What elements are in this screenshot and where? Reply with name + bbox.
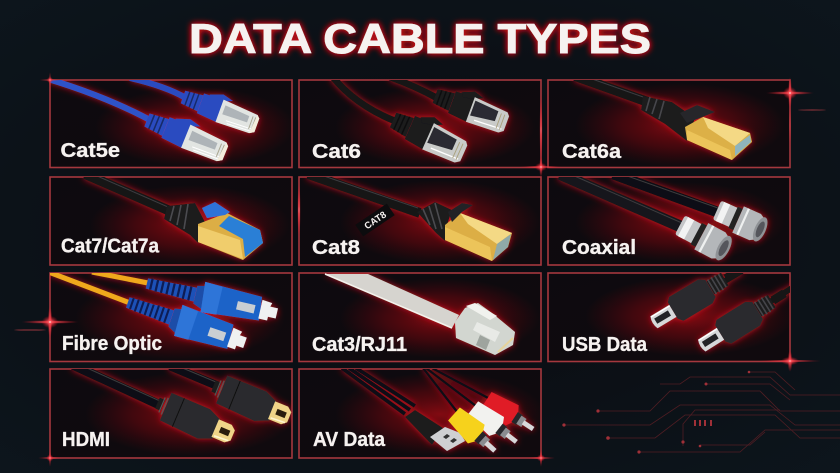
icon: flat cable and RJ11 plug (325, 274, 515, 355)
panel: USB Data (547, 272, 791, 362)
icon: blue Cat5e cables (45, 78, 261, 164)
label: Cat8 (312, 237, 360, 259)
icon: fibre optic SC connectors (50, 273, 282, 354)
label: Coaxial (562, 237, 636, 259)
icon: CAT8 cable tag (355, 204, 395, 236)
icon: Cat8 plug (308, 172, 512, 261)
panel: Fibre Optic (46, 269, 292, 362)
title: DATA CABLE TYPES (189, 15, 651, 62)
icon: coaxial F connectors (560, 171, 771, 264)
icon: HDMI plugs (68, 369, 292, 446)
label: Fibre Optic (62, 333, 162, 355)
circuit nodes (562, 371, 750, 454)
panel: Cat8 (299, 172, 541, 265)
icon: USB and RCA AV plugs (342, 368, 540, 460)
icon: shielded Cat6a plug (575, 74, 752, 160)
label: HDMI (62, 429, 110, 451)
label: Cat3/RJ11 (312, 334, 407, 356)
icon: CAT8 cable tag: CAT8 (362, 210, 389, 232)
icon: Cat7 blue and gold plug (85, 172, 263, 260)
panel: Cat3/RJ11 (299, 273, 541, 362)
panel: Cat7/Cat7a (50, 172, 292, 265)
panel: Cat5e (45, 78, 295, 168)
label: Cat6a (562, 141, 622, 163)
label: Cat5e (60, 140, 120, 162)
label: Cat6 (312, 141, 361, 163)
icon: USB-C connectors (647, 273, 790, 356)
label: Cat7/Cat7a (61, 236, 160, 258)
panel: HDMI (50, 363, 295, 458)
label: USB Data (562, 334, 648, 356)
panel: Coaxial (548, 171, 790, 265)
icon: black Cat6 cables (332, 76, 511, 165)
label: AV Data (313, 429, 386, 451)
panel: Cat6a (548, 74, 790, 168)
panel: AV Data (299, 368, 545, 460)
panel: Cat6 (299, 76, 541, 168)
circuit board traces (562, 372, 840, 452)
